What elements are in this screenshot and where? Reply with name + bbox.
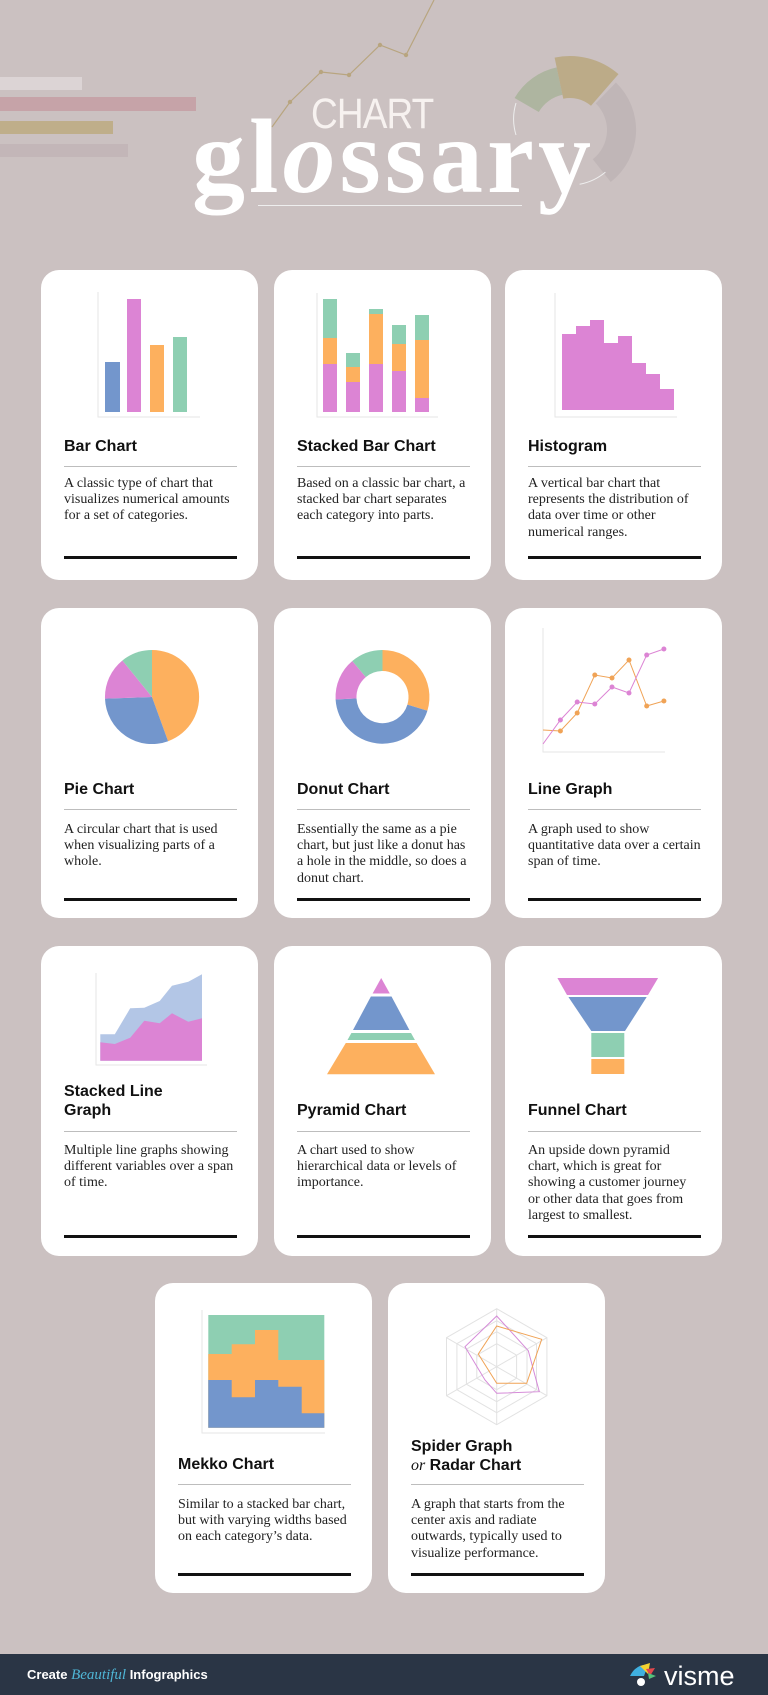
- card: mekko chart: [155, 1283, 372, 1593]
- title: Histogram: [528, 438, 607, 455]
- title: Bar Chart: [64, 438, 137, 455]
- title: Stacked Line: [64, 1083, 163, 1100]
- card: histogram: [505, 270, 722, 580]
- title: glossary: [192, 98, 595, 215]
- visme logo: [630, 1661, 735, 1690]
- description: A graph used to show quantitative data over a certain span of time.: [528, 822, 701, 869]
- title: [64, 1083, 163, 1119]
- description: A vertical bar chart that represents the distribution of data over time or other numerical ranges.: [528, 476, 689, 540]
- card: line graph: [505, 608, 722, 918]
- description: Based on a classic bar chart, a stacked bar chart separates each category into parts.: [297, 476, 465, 523]
- chart: histogram: [554, 293, 677, 418]
- chart: stacked area: [96, 973, 207, 1066]
- description: Essentially the same as a pie chart, but just like a donut has a hole in the middle, so does a donut chart.: [297, 822, 467, 886]
- header decoration: line and donut: [272, 0, 636, 185]
- description: A chart used to show hierarchical data or levels of importance.: [297, 1143, 456, 1190]
- title: Donut Chart: [297, 781, 389, 798]
- title: Pie Chart: [64, 781, 134, 798]
- chart: pie: [105, 650, 200, 744]
- chart: donut: [336, 650, 430, 744]
- description: A circular chart that is used when visualizing parts of a whole.: [64, 822, 218, 869]
- chart: funnel: [558, 978, 658, 1074]
- title: Spider Graph: [411, 1438, 512, 1455]
- title: CHART: [311, 90, 433, 138]
- card: funnel chart: [505, 946, 722, 1256]
- title: Mekko Chart: [178, 1456, 274, 1473]
- footer text: Create Beautiful Infographics: [27, 1667, 208, 1683]
- title: Graph: [64, 1102, 111, 1119]
- chart: bar: [98, 292, 200, 418]
- title: Pyramid Chart: [297, 1102, 406, 1119]
- chart: pyramid: [327, 978, 435, 1074]
- header decoration: left bars: [0, 77, 196, 157]
- card: spider / radar chart: [388, 1283, 605, 1593]
- description: A classic type of chart that visualizes numerical amounts for a set of categories.: [64, 476, 230, 523]
- card: stacked bar chart: [274, 270, 491, 580]
- card: pie chart: [41, 608, 258, 918]
- description: A graph that starts from the center axis and radiate outwards, typically used to visualize performance.: [411, 1497, 565, 1561]
- title: Line Graph: [528, 781, 612, 798]
- title: Stacked Bar Chart: [297, 438, 436, 455]
- chart: line: [542, 628, 666, 752]
- title: [411, 1438, 521, 1474]
- description: Similar to a stacked bar chart, but with varying widths based on each category’s data.: [178, 1497, 347, 1544]
- footer: [0, 1654, 768, 1695]
- card: donut chart: [274, 608, 491, 918]
- chart: radar: [446, 1308, 548, 1426]
- card: stacked line graph: [41, 946, 258, 1256]
- title: Funnel Chart: [528, 1102, 627, 1119]
- card: pyramid chart: [274, 946, 491, 1256]
- chart: stacked bar: [316, 293, 438, 418]
- title: or Radar Chart: [411, 1457, 521, 1474]
- description: Multiple line graphs showing different variables over a span of time.: [64, 1143, 233, 1190]
- card: bar chart: [41, 270, 258, 580]
- chart: mekko: [202, 1310, 325, 1434]
- description: An upside down pyramid chart, which is great for showing a customer journey or other data that goes from largest to smallest.: [528, 1143, 686, 1223]
